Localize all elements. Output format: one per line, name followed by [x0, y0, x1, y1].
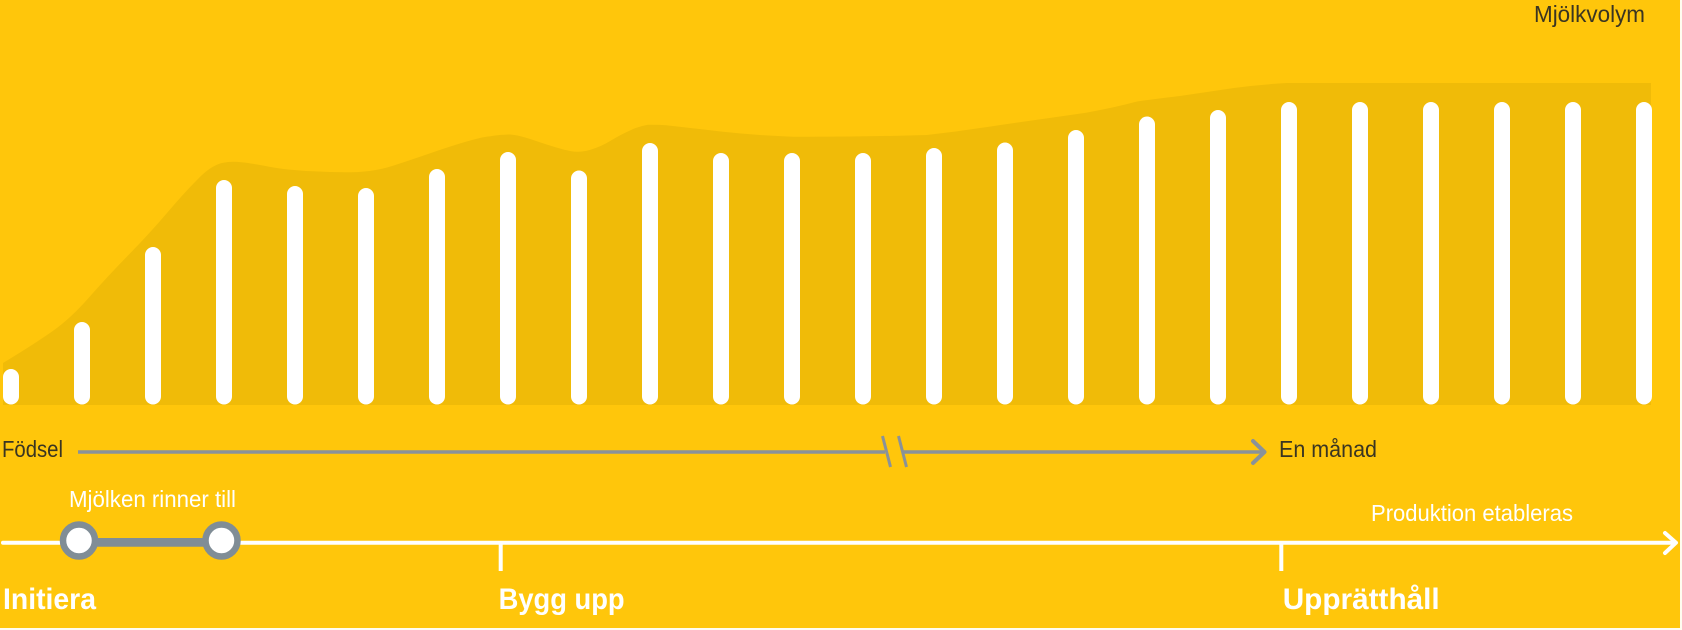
axis label: Mjölkvolym: Mjölkvolym [1534, 1, 1645, 27]
label: Mjölken rinner till: Mjölken rinner till [69, 486, 236, 512]
marker: milk let-down range [63, 524, 238, 556]
label: En månad: En månad [1279, 436, 1377, 462]
heading: Initiera: Initiera [3, 583, 96, 616]
chart: milk volume area [3, 83, 1651, 405]
bar chart: daily milk volume [3, 102, 1652, 404]
heading: Bygg upp: Bygg upp [499, 583, 625, 616]
arrow: phase timeline [3, 533, 1676, 571]
arrow: time axis with break [78, 436, 1264, 467]
heading: Upprätthåll: Upprätthåll [1283, 583, 1440, 616]
label: Produktion etableras: Produktion etableras [1371, 500, 1573, 526]
label: Födsel: Födsel [2, 436, 63, 462]
